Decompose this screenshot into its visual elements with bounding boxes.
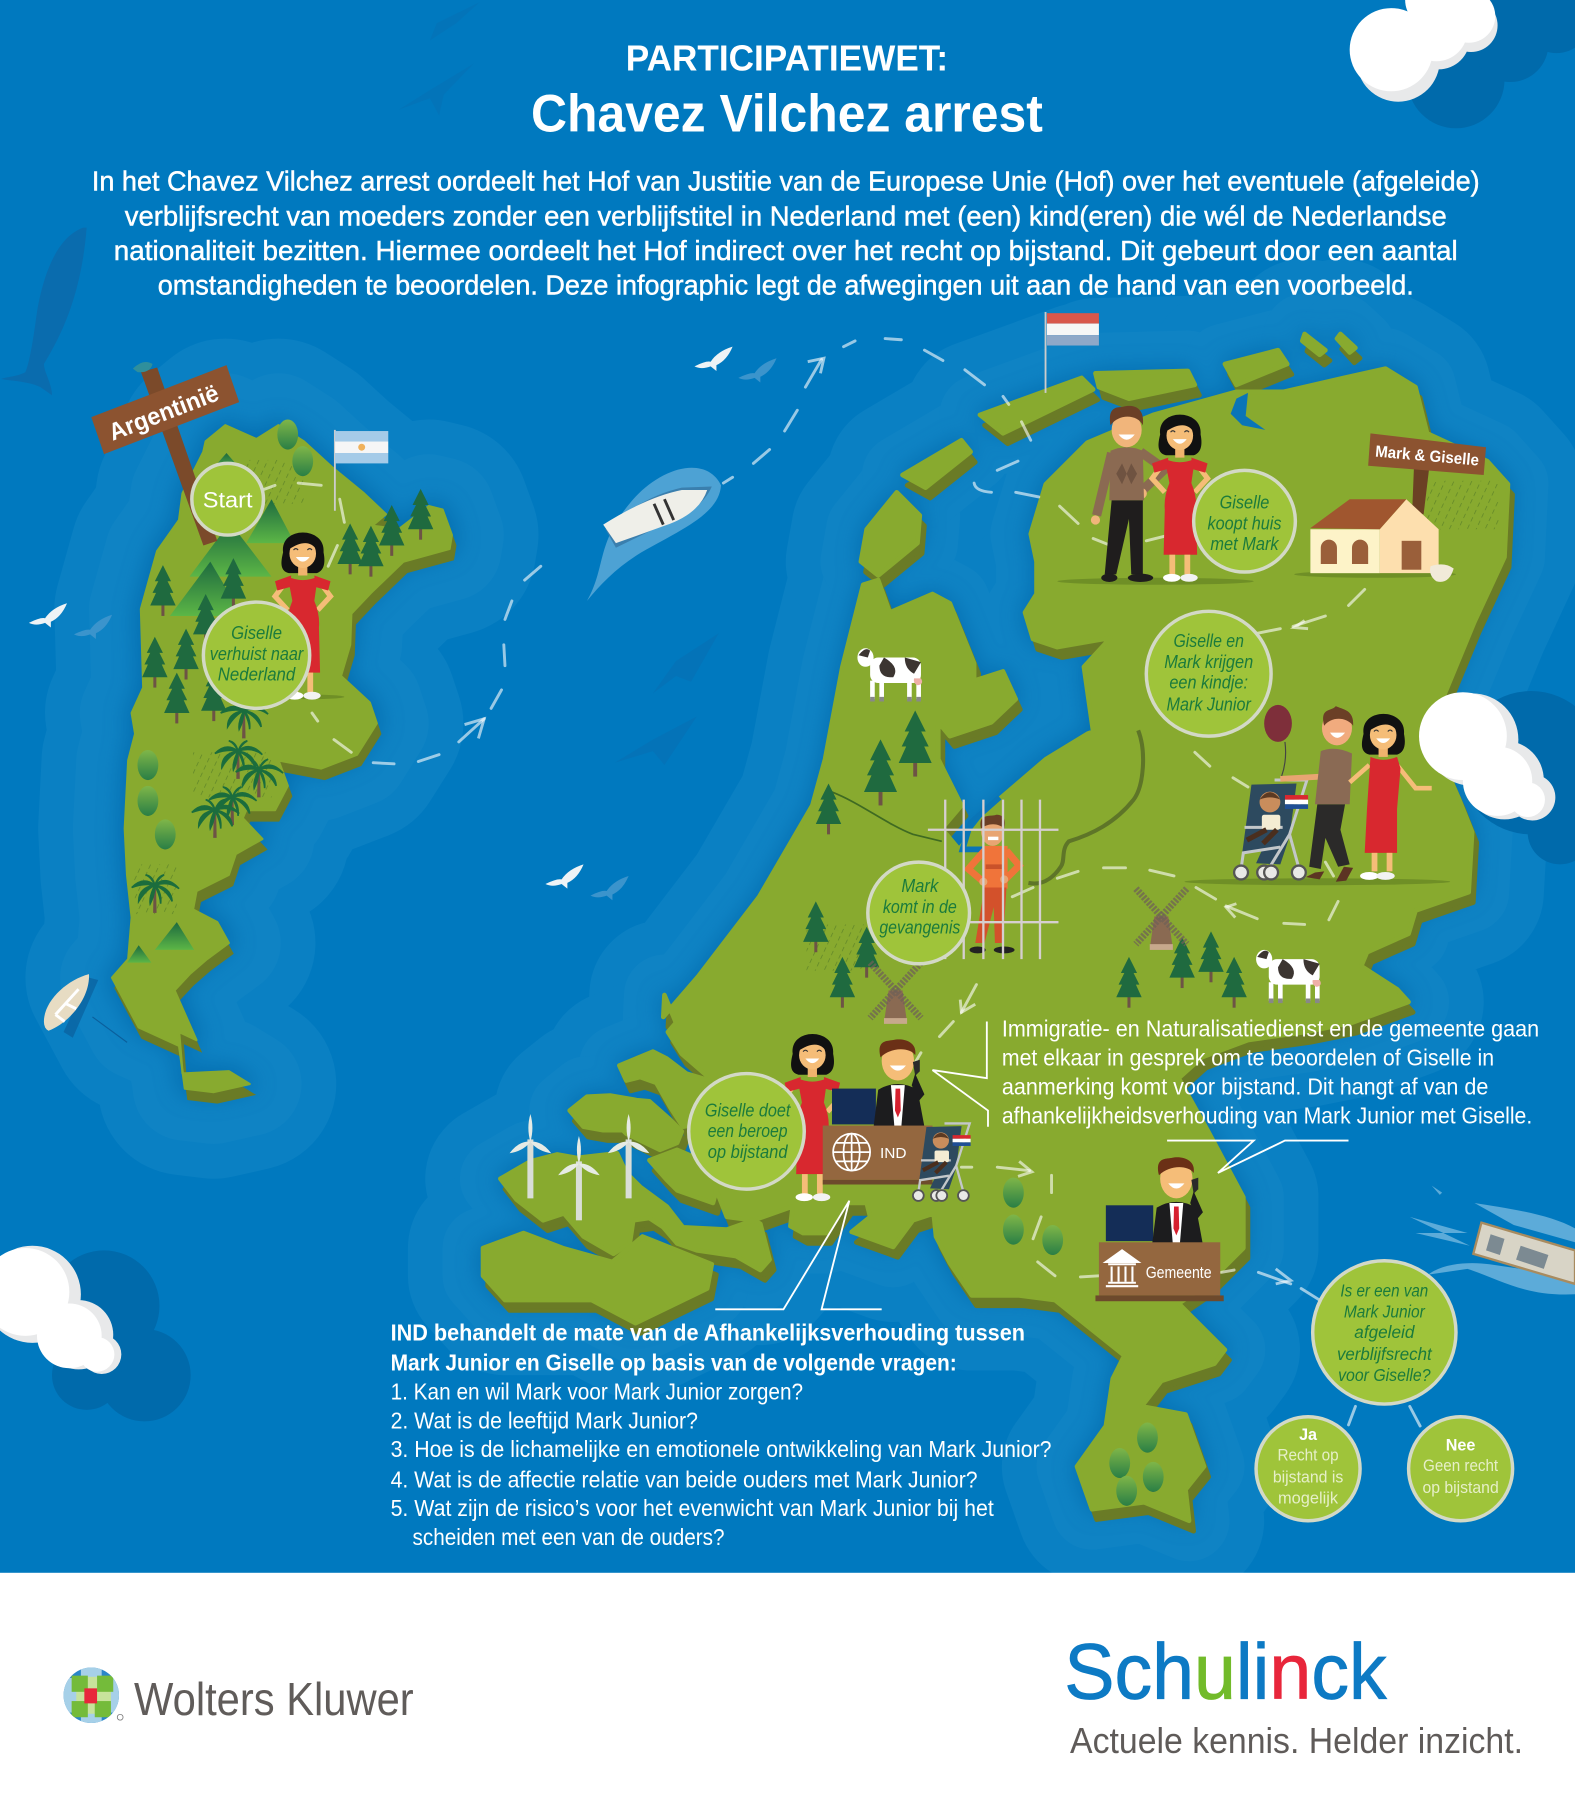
bubble: Giselle en Mark krijgen een kindje: Giselle en [1173, 630, 1244, 651]
bubble: Giselle koopt huis met Mark: koopt huis [1208, 512, 1281, 533]
callout: IND questions [391, 1201, 1052, 1550]
bubble: Ja: mogelijk [1278, 1489, 1339, 1507]
sign: Argentinië [91, 362, 239, 545]
flag: Argentina [334, 430, 388, 511]
bubble: Start [192, 463, 263, 535]
callout: IND questions: 2. Wat is de leeftijd Mark Junior? [391, 1407, 698, 1433]
callout: IND and gemeente: aanmerking komt voor bijstand. Dit hangt af van de [1002, 1073, 1488, 1099]
bubble: Ja: Ja [1299, 1426, 1318, 1444]
wind turbines [510, 1114, 649, 1220]
IND desk with Giselle, official and stroller [785, 1034, 971, 1201]
bubble: question: afgeleid [1354, 1322, 1416, 1342]
callout: IND questions: IND behandelt de mate van de Afhankelijksverhouding tussen [391, 1320, 1025, 1346]
bubble: question: voor Giselle? [1338, 1365, 1431, 1385]
trees: Argentina [132, 419, 433, 913]
Gemeente desk with official [1095, 1157, 1224, 1301]
sailboat [44, 974, 127, 1042]
title: PARTICIPATIEWET: [626, 38, 948, 78]
bubble: Giselle doet een beroep op bijstand [689, 1074, 804, 1189]
map: Netherlands [483, 334, 1513, 1531]
speedboat [587, 468, 721, 601]
bubble: Mark komt in de gevangenis [868, 862, 969, 964]
bubble: Ja: Recht op [1277, 1447, 1339, 1465]
bubble: Nee [1409, 1417, 1513, 1521]
intro text: verblijfsrecht van moeders zonder een verblijfstitel in Nederland met (een) kind(eren) die wél de Nederlandse [125, 200, 1447, 231]
callout: IND and gemeente: Immigratie- en Naturalisatiedienst en de gemeente gaan [1002, 1016, 1539, 1042]
soft coastal shadow [112, 334, 1508, 1521]
sea creatures [1, 2, 719, 765]
characters: family with stroller [1184, 705, 1450, 885]
bubble: question: Is er een van [1340, 1281, 1428, 1301]
mother [1350, 714, 1432, 880]
bubble: Giselle koopt huis met Mark: met Mark [1210, 533, 1280, 554]
clouds [0, 0, 1555, 1374]
bubble: Giselle verhuist naar Nederland: Nederland [218, 664, 296, 685]
ferry [1410, 1186, 1575, 1295]
bubble: Mark komt in de gevangenis: Mark [901, 875, 940, 896]
mountains [127, 453, 295, 963]
intro text: nationaliteit bezitten. Hiermee oordeelt het Hof indirect over het recht op bijstand. Dit gebeurt door een aantal [114, 235, 1458, 266]
footer [0, 1573, 1575, 1812]
bubble: question [1313, 1261, 1456, 1404]
sign: Mark & Giselle: Mark & Giselle [1375, 443, 1480, 470]
prison bars with Mark [928, 800, 1058, 959]
callout: IND and gemeente: afhankelijkheidsverhouding van Mark Junior met Giselle. [1002, 1102, 1532, 1128]
bubble: Giselle koopt huis met Mark [1194, 470, 1295, 572]
bubble: Giselle verhuist naar Nederland [203, 602, 310, 708]
clouds shadow [49, 0, 1575, 1421]
bubble: question: verblijfsrecht [1337, 1344, 1433, 1364]
bubble: Giselle doet een beroep op bijstand: Giselle doet [705, 1099, 791, 1120]
IND desk with Giselle, official and stroller: IND [880, 1145, 907, 1162]
bubble: Giselle en Mark krijgen een kindje: een kindje: [1169, 672, 1248, 693]
callout: IND questions: 1. Kan en wil Mark voor Mark Junior zorgen? [391, 1378, 803, 1404]
cows [857, 648, 1321, 1003]
bubble: Mark komt in de gevangenis: komt in de [883, 896, 957, 917]
sign: Argentinië: Argentinië [105, 380, 223, 446]
title [531, 38, 1043, 144]
intro text [92, 166, 1480, 301]
bubble: question: Mark Junior [1344, 1301, 1426, 1321]
logo: Wolters Kluwer: Wolters Kluwer [134, 1673, 414, 1725]
callout: IND questions: Mark Junior en Giselle op basis van de volgende vragen: [391, 1350, 957, 1376]
birds [29, 347, 777, 900]
intro text: omstandigheden te beoordelen. Deze infographic legt de afwegingen uit aan de hand van een voorbeeld. [158, 270, 1414, 301]
trees: Netherlands [803, 710, 1247, 1506]
father [1280, 706, 1353, 882]
house [1294, 456, 1456, 582]
logo: Schulinck: Schulinck [1064, 1628, 1387, 1716]
bubble: Mark komt in de gevangenis: gevangenis [879, 917, 960, 938]
character: Giselle in Argentina [275, 532, 344, 700]
bubble: Giselle koopt huis met Mark: Giselle [1220, 491, 1269, 512]
bubble: Giselle en Mark krijgen een kindje: Mark Junior [1167, 694, 1252, 715]
characters: Mark and Giselle [1057, 406, 1254, 585]
bubble: Ja [1256, 1417, 1360, 1521]
callout: IND questions: 4. Wat is de affectie relatie van beide ouders met Mark Junior? [391, 1466, 978, 1492]
bubble: Giselle verhuist naar Nederland: Giselle [231, 622, 282, 643]
logo: Schulinck [1064, 1628, 1523, 1761]
water halos around land [112, 334, 1508, 1521]
logo: Wolters Kluwer [64, 1668, 414, 1725]
callout: IND and gemeente: met elkaar in gesprek om te beoordelen of Giselle in [1002, 1044, 1494, 1070]
bubble: Nee: Geen recht [1423, 1457, 1499, 1475]
windmills [870, 889, 1187, 1024]
route: dashed path [262, 339, 1420, 1426]
bubble: Ja: bijstand is [1273, 1469, 1343, 1487]
bubble: Giselle en Mark krijgen een kindje: Mark krijgen [1164, 651, 1253, 672]
title: Chavez Vilchez arrest [531, 85, 1043, 144]
intro text: In het Chavez Vilchez arrest oordeelt het Hof van Justitie van de Europese Unie (Hof) over het eventuele (afgeleide) [92, 166, 1480, 197]
bubble: Giselle doet een beroep op bijstand: op bijstand [708, 1141, 788, 1162]
bubble: Start: Start [203, 487, 252, 512]
sign: Mark & Giselle [1368, 433, 1486, 475]
bubble: Nee: Nee [1446, 1436, 1475, 1454]
callout: IND and gemeente [933, 1016, 1539, 1173]
logo: Schulinck: Actuele kennis. Helder inzicht. [1070, 1721, 1523, 1761]
bubble: Giselle verhuist naar Nederland: verhuist naar [210, 643, 304, 664]
Gemeente desk with official: Gemeente [1146, 1264, 1212, 1282]
bubble: Giselle doet een beroep op bijstand: een beroep [708, 1120, 788, 1141]
bubble: Nee: op bijstand [1422, 1479, 1499, 1497]
route arrows [465, 358, 1308, 1284]
callout: IND questions: 5. Wat zijn de risico’s voor het evenwicht van Mark Junior bij het [391, 1495, 994, 1521]
bubble: Giselle en Mark krijgen een kindje [1146, 611, 1271, 736]
map: Argentina [112, 425, 455, 1102]
callout: IND questions: scheiden met een van de ouders? [413, 1524, 725, 1550]
flag: Netherlands [1045, 312, 1099, 393]
callout: IND questions: 3. Hoe is de lichamelijke en emotionele ontwikkeling van Mark Junior? [391, 1436, 1052, 1462]
